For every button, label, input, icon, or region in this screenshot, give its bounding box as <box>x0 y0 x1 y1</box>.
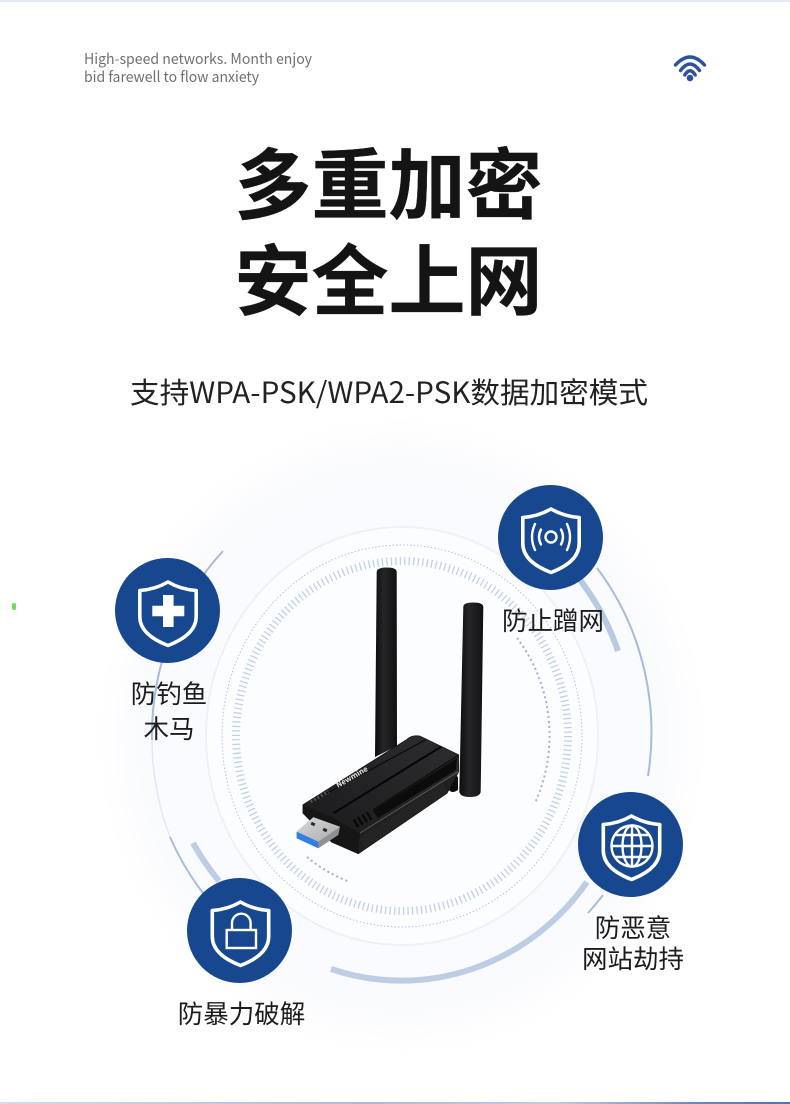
badge: anti wifi-leeching <box>498 485 604 638</box>
top edge strip <box>0 0 790 2</box>
label: 防暴力破解 <box>178 994 305 1031</box>
header tagline: High-speed networks. Month enjoy <box>84 48 312 69</box>
icon: plus <box>152 595 184 627</box>
adapter body <box>303 736 458 853</box>
badge: anti malicious site hijack <box>578 792 684 976</box>
green marker dot <box>12 603 16 610</box>
USB plug <box>297 817 340 848</box>
icon: padlock <box>227 914 256 948</box>
vents <box>310 791 328 801</box>
label: 网站劫持 <box>582 939 684 976</box>
title: 安全上网 <box>234 221 542 332</box>
label: 防恶意 <box>595 908 671 945</box>
brand label: Newmine <box>334 763 370 791</box>
icon: wifi <box>676 57 704 81</box>
title <box>234 125 542 332</box>
front antenna <box>459 602 483 797</box>
subtitle: 支持WPA-PSK/WPA2-PSK数据加密模式 <box>130 370 648 412</box>
outer accent arcs <box>152 551 651 981</box>
header tagline: bid farewell to flow anxiety <box>84 66 259 87</box>
label <box>131 674 207 746</box>
icon: globe <box>612 826 652 866</box>
title: 多重加密 <box>234 125 542 236</box>
ring diagram background <box>97 416 707 1056</box>
header tagline <box>84 48 312 87</box>
badge: anti brute force <box>178 878 305 1031</box>
badge: anti-phishing trojan <box>115 558 220 746</box>
rear antenna <box>375 568 397 757</box>
label <box>582 908 684 976</box>
icon: signal waves <box>532 524 570 550</box>
bottom edge strip <box>0 1102 790 1104</box>
USB wifi adapter product image <box>297 568 483 853</box>
label: 防钓鱼 <box>131 674 207 711</box>
antenna hinge <box>449 775 458 792</box>
label: 防止蹭网 <box>502 601 604 638</box>
dotted inner arcs <box>307 638 550 882</box>
label: 木马 <box>143 709 195 746</box>
